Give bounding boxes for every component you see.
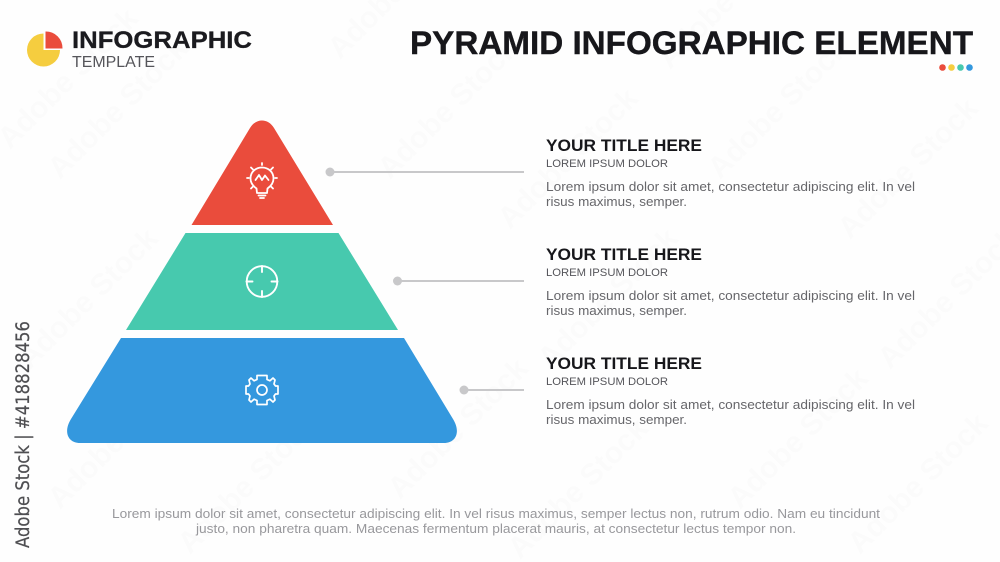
text block: top: LOREM IPSUM DOLOR [546, 158, 668, 170]
icon: gear [246, 376, 278, 404]
watermark credit: Adobe Stock | #418828456 [13, 321, 34, 548]
icon: pie chart [27, 31, 63, 66]
connector: top [326, 168, 524, 176]
logo subtitle: TEMPLATE [72, 54, 155, 71]
background watermark: Adobe Stock [382, 352, 535, 505]
background watermark: Adobe Stock [702, 32, 855, 185]
footer text: justo, non pharetra quam. Maecenas fermentum placerat mauris, at consectetur lectus tempor non. [195, 522, 796, 536]
logo title: INFOGRAPHIC [72, 27, 252, 54]
text block: bottom [546, 354, 915, 427]
text block: bottom: Lorem ipsum dolor sit amet, consectetur adipiscing elit. In vel [546, 398, 915, 412]
text block: middle: Lorem ipsum dolor sit amet, consectetur adipiscing elit. In vel [546, 289, 915, 303]
background watermark: Adobe Stock [372, 32, 525, 185]
footer text [112, 507, 881, 536]
pyramid tier: blue [67, 338, 457, 443]
background watermark: Adobe Stock [842, 407, 995, 560]
icon: target [246, 266, 278, 297]
logo [27, 27, 252, 71]
title: PYRAMID INFOGRAPHIC ELEMENT [410, 25, 973, 61]
background watermark: Adobe Stock [832, 92, 985, 245]
connector: middle [393, 276, 524, 286]
text block: middle: risus maximus, semper. [546, 304, 687, 318]
pyramid tier: red [192, 120, 333, 225]
text block: middle: LOREM IPSUM DOLOR [546, 267, 668, 279]
pyramid tier: green [126, 233, 398, 330]
footer text: Lorem ipsum dolor sit amet, consectetur adipiscing elit. In vel risus maximus, semper lectus non, rutrum odio. Nam eu tincidunt [112, 507, 881, 521]
text block: top [546, 136, 915, 209]
text block: top: YOUR TITLE HERE [546, 136, 702, 155]
connector: bottom [460, 386, 524, 394]
pyramid [67, 120, 457, 443]
text block: bottom: LOREM IPSUM DOLOR [546, 376, 668, 388]
icon: light bulb [247, 163, 277, 198]
background watermark: Adobe Stock [172, 407, 325, 560]
text block: bottom: YOUR TITLE HERE [546, 354, 702, 373]
background watermark: Adobe Stock [12, 222, 165, 375]
background watermark: Adobe Stock [42, 362, 195, 515]
colour dots [939, 64, 973, 71]
background watermark: Adobe Stock [532, 222, 685, 375]
background watermark: Adobe Stock [492, 82, 645, 235]
background watermark: Adobe Stock [502, 412, 655, 562]
background watermark: Adobe Stock [722, 362, 875, 515]
text block: top: risus maximus, semper. [546, 195, 687, 209]
text block: top: Lorem ipsum dolor sit amet, consectetur adipiscing elit. In vel [546, 180, 915, 194]
text block: bottom: risus maximus, semper. [546, 413, 687, 427]
text block: middle [546, 245, 915, 318]
background watermark: Adobe Stock [42, 32, 195, 185]
text block: middle: YOUR TITLE HERE [546, 245, 702, 264]
